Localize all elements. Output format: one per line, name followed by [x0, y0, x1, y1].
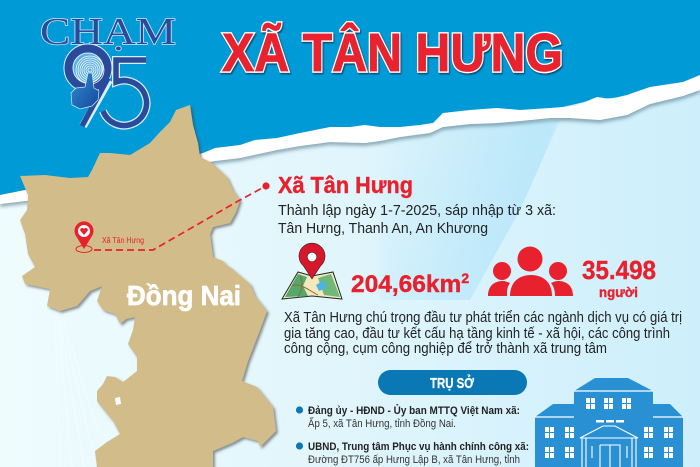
logo: Chạm 95 — [40, 11, 176, 126]
description paragraph — [284, 310, 682, 357]
stat: area: 204,66km — [351, 271, 461, 298]
office item 2 — [296, 441, 529, 466]
icon: office building — [535, 378, 683, 467]
founding text: Tân Hưng, Thanh An, An Khương — [278, 221, 488, 237]
founding text — [278, 203, 556, 237]
map enclave — [115, 397, 121, 405]
logo wordmark: CHẠM — [40, 11, 176, 53]
office item 1: Ấp 5, xã Tân Hưng, tỉnh Đồng Nai. — [308, 417, 456, 430]
office list — [296, 404, 529, 466]
map shape — [20, 105, 276, 467]
leader line to commune — [94, 182, 270, 250]
heading pill: Trụ sở — [378, 370, 527, 395]
icon: pointing hand — [71, 73, 99, 109]
map: Đồng Nai province — [20, 105, 276, 467]
stat: population — [582, 255, 656, 300]
founding text: Thành lập ngày 1-7-2025, sáp nhập từ 3 xã: — [278, 203, 556, 219]
map label: Đồng Nai: Đồng Nai — [127, 280, 241, 311]
heading pill: Trụ sở: TRỤ SỞ — [430, 374, 474, 392]
icon: area map with pin — [282, 243, 342, 299]
commune heading: Xã Tân Hưng — [278, 172, 413, 198]
stat: population: 35.498 — [582, 255, 656, 285]
stat: area: 2 — [461, 270, 469, 286]
stat: population: người — [599, 284, 638, 300]
office item 2: UBND, Trung tâm Phục vụ hành chính công xã: — [308, 441, 529, 453]
logo numeral 9 — [68, 48, 109, 126]
logo numeral 5 — [103, 60, 147, 126]
icon: people — [488, 246, 573, 296]
description paragraph: công cộng, cụm công nghiệp để trở thành xã trung tâm — [284, 341, 607, 357]
map label: Xã Tân Hưng: Xã Tân Hưng — [102, 236, 144, 245]
title: XÃ TÂN HƯNG — [222, 22, 563, 83]
office item 1: Đảng ủy - HĐND - Ủy ban MTTQ Việt Nam xã: — [308, 404, 520, 417]
title: XÃ TÂN HƯNG — [222, 22, 563, 83]
icon: location pin on map — [75, 221, 94, 252]
office item 2: Đường ĐT756 ấp Hưng Lập B, xã Tân Hưng, tỉnh — [308, 454, 520, 466]
office item 1 — [296, 404, 520, 430]
icon: fingerprint — [76, 56, 104, 84]
